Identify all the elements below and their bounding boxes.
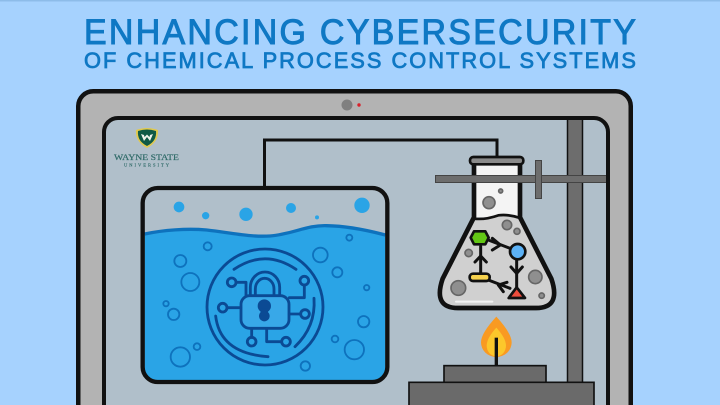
particles: [451, 189, 544, 298]
icon: shield: [136, 128, 158, 148]
burner base: [409, 382, 594, 405]
icon: flame: [481, 317, 512, 357]
lock shackle: [250, 272, 280, 296]
node: blue circle: [510, 244, 525, 259]
flask highlight: [455, 301, 493, 303]
bubbles: [163, 235, 369, 371]
flask outline: [440, 163, 554, 308]
reaction arrows: [475, 238, 522, 292]
panel: water tank with lock: [143, 188, 387, 382]
logo: Wayne State University: [114, 128, 179, 168]
node: yellow pill: [470, 274, 490, 281]
flask liquid: [440, 215, 554, 307]
heading line 1: ENHANCING CYBERSECURITY: [84, 14, 636, 52]
clamp rod: [436, 176, 606, 182]
lock body: [241, 296, 289, 328]
laptop: [78, 91, 631, 405]
flask neck: [474, 163, 520, 217]
laptop bezel: [78, 91, 631, 405]
burner: [409, 317, 594, 405]
burner top: [444, 366, 546, 386]
connecting wire: [264, 140, 497, 188]
clamp: [436, 160, 606, 198]
circuit traces: [236, 282, 246, 295]
water surface: [145, 226, 385, 236]
icon: circuit padlock: [207, 249, 323, 365]
screen border: [104, 118, 608, 405]
wick: [495, 338, 498, 366]
stand pole: [568, 119, 582, 383]
flask with reaction cycle: [440, 157, 554, 308]
tank outline: [143, 188, 387, 382]
webcam light: [357, 103, 361, 107]
airborne droplets: [174, 198, 370, 221]
flask lid: [470, 157, 523, 164]
screen: [104, 118, 608, 405]
keyhole: [258, 299, 271, 321]
webcam: [342, 100, 352, 110]
node: green hexagon: [471, 231, 489, 244]
inner arcs: [234, 259, 296, 269]
heading line 2: OF CHEMICAL PROCESS CONTROL SYSTEMS: [84, 48, 636, 73]
node: red triangle: [509, 287, 525, 298]
water: [145, 226, 385, 380]
circuit nodes: [227, 278, 236, 287]
logo wordmark: WAYNE STATE: [114, 152, 179, 162]
clamp screw: [536, 160, 542, 198]
outer ring: [207, 249, 323, 365]
liquid surface: [474, 215, 520, 219]
title: [84, 14, 636, 73]
tank background: [143, 188, 387, 382]
logo subtext: UNIVERSITY: [124, 162, 170, 168]
